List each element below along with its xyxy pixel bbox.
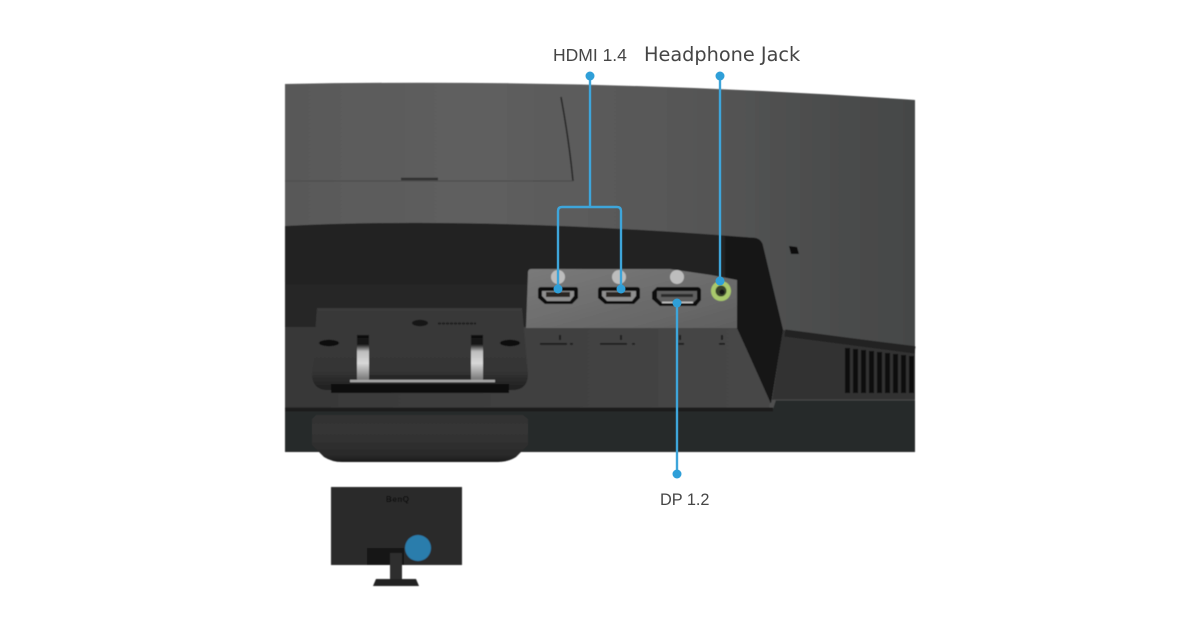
VESA cover outline [285, 97, 573, 181]
thumbnail stand [367, 548, 419, 586]
thumbnail body [331, 487, 462, 565]
HDMI callout [554, 72, 626, 294]
locator thumbnail monitor [331, 487, 462, 586]
Headphone callout [716, 72, 724, 286]
front lip [285, 400, 915, 452]
callout lines and dots [554, 72, 724, 478]
recessed dark cavity [285, 223, 783, 403]
port printed marks [540, 335, 725, 345]
DisplayPort [652, 287, 701, 306]
rear housing [285, 83, 915, 452]
label: HDMI 1.4: HDMI 1.4 [553, 45, 627, 65]
HDMI port 2 [598, 287, 640, 304]
stand mount plate [312, 308, 528, 393]
label: DP 1.2: DP 1.2 [660, 491, 709, 509]
port panel [526, 269, 737, 328]
label: Headphone Jack: Headphone Jack [644, 43, 801, 66]
cavity floor [285, 327, 770, 408]
DP callout [672, 298, 682, 478]
audio jack [711, 281, 731, 301]
thumbnail highlight [405, 535, 431, 561]
HDMI port 1 [538, 287, 578, 304]
stand foot cover [312, 415, 528, 462]
port icons [551, 270, 684, 284]
monitor rear close-up [285, 83, 915, 462]
security slot [789, 246, 799, 254]
cavity side wall [725, 236, 783, 403]
thumbnail logo: BenQ [386, 495, 409, 504]
vent section [772, 330, 915, 400]
